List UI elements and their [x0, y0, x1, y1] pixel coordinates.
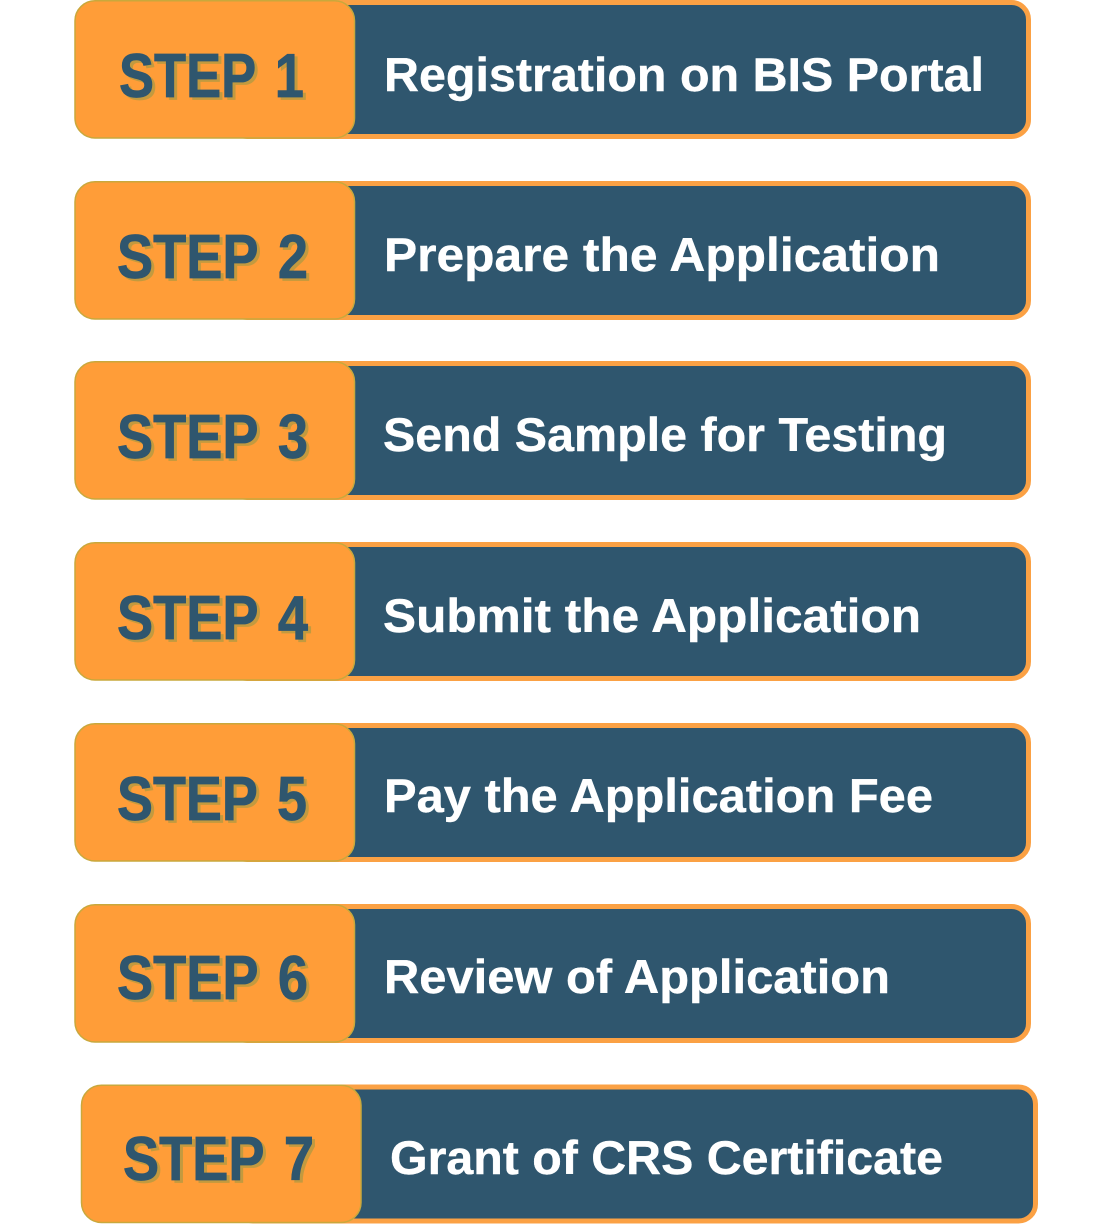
step 4 description: Submit the Application — [383, 589, 921, 642]
step 2 description: Prepare the Application — [384, 228, 940, 281]
step 2 label: STEP 2 — [117, 223, 308, 292]
step 2 description bar — [230, 184, 1028, 318]
step 3 label: STEP 3 — [120, 406, 311, 474]
step 4 label: STEP 4 — [120, 586, 311, 656]
step 4 description bar — [230, 544, 1028, 678]
step 5 label: STEP 5 — [120, 768, 310, 836]
step 7 description bar — [236, 1087, 1036, 1221]
step 4 row — [75, 543, 1028, 680]
step 6 description: Review of Application — [384, 950, 890, 1003]
step 7 label tab — [82, 1085, 361, 1222]
step 3 description: Send Sample for Testing — [383, 408, 947, 461]
step 3 description bar — [230, 364, 1028, 498]
step 7 row — [82, 1085, 1036, 1222]
step 4 label tab — [75, 543, 354, 680]
step 1 label: STEP 1 — [119, 42, 304, 111]
step 1 row — [75, 1, 1028, 138]
step 5 label tab — [75, 724, 354, 861]
step 5 description bar — [230, 726, 1028, 860]
step 3 label tab — [75, 362, 354, 499]
step 1 label tab — [75, 1, 354, 138]
step 5 label: STEP 5 — [117, 765, 307, 834]
step 2 row — [75, 182, 1028, 319]
step 6 label tab — [75, 905, 354, 1042]
step 1 description bar — [230, 2, 1028, 136]
step 7 description: Grant of CRS Certificate — [390, 1131, 943, 1184]
step 6 label: STEP 6 — [117, 944, 308, 1013]
step 3 row — [75, 362, 1028, 499]
step 7 label: STEP 7 — [123, 1125, 314, 1194]
step 4 label: STEP 4 — [117, 584, 308, 653]
step 7 label: STEP 7 — [126, 1128, 317, 1196]
step 1 label: STEP 1 — [122, 44, 307, 114]
step 1 description: Registration on BIS Portal — [384, 48, 984, 101]
step 2 label: STEP 2 — [120, 226, 311, 294]
step 6 description bar — [230, 906, 1028, 1040]
step 2 label tab — [75, 182, 354, 319]
step 5 description: Pay the Application Fee — [384, 769, 933, 822]
step 3 label: STEP 3 — [117, 403, 308, 472]
step 5 row — [75, 724, 1028, 861]
step 6 row — [75, 905, 1028, 1042]
step 6 label: STEP 6 — [120, 946, 311, 1016]
